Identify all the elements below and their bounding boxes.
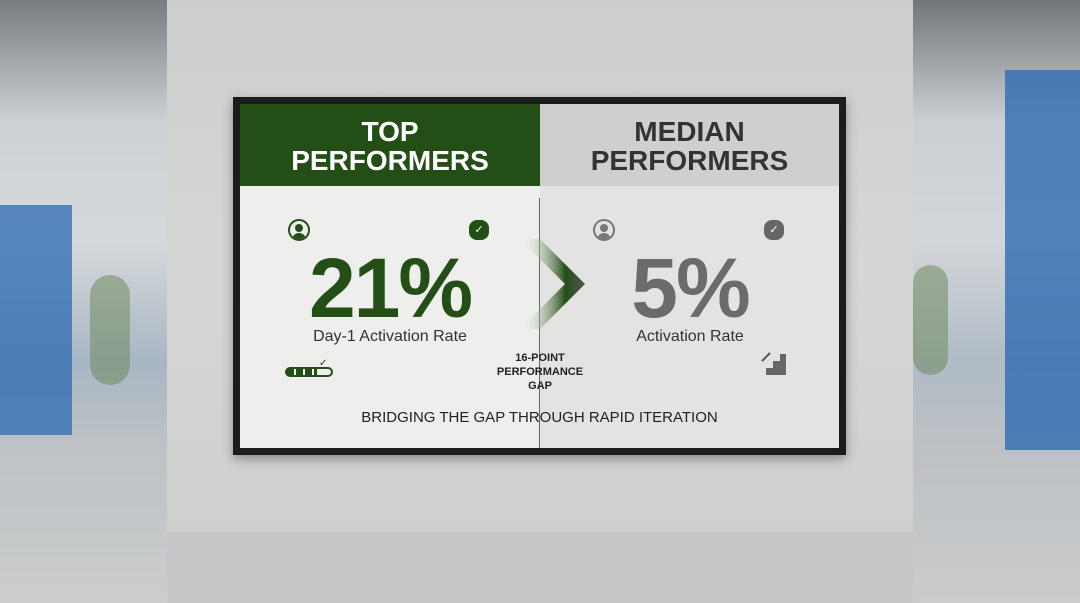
icon: badge left <box>469 220 489 240</box>
header: median performers: PERFORMERS <box>591 145 788 176</box>
icon: badge right <box>764 220 784 240</box>
text: gap: 16-POINT <box>515 352 565 364</box>
text: bottom tagline: BRIDGING THE GAP THROUGH RAPID ITERATION <box>361 409 718 426</box>
header: median performers <box>540 104 839 186</box>
text: gap: GAP <box>528 380 552 392</box>
header: top performers <box>240 104 540 186</box>
label: day-1: Day-1 Activation Rate <box>313 328 467 345</box>
divider <box>539 198 540 448</box>
icon: person right <box>593 219 615 241</box>
screen content <box>240 104 839 448</box>
text: gap: PERFORMANCE <box>497 366 583 378</box>
icon: person left <box>288 219 310 241</box>
header: top performers: TOP <box>361 116 419 147</box>
text: gap <box>497 352 583 392</box>
arrow: chevron <box>530 239 585 329</box>
header: top performers: PERFORMERS <box>291 145 489 176</box>
stat: 21%: 21% <box>309 241 471 335</box>
background: office corridor left <box>0 0 167 603</box>
screen frame <box>233 97 846 455</box>
background: concrete wall <box>167 0 913 532</box>
icon: progress bar: ✓ <box>319 358 327 369</box>
icon: badge right: ✓ <box>769 224 779 236</box>
icon: stairs <box>761 352 786 375</box>
background: floor <box>167 532 913 603</box>
stat: 5%: 5% <box>631 241 749 335</box>
right panel body tint <box>540 186 839 448</box>
icon: progress bar <box>285 358 333 377</box>
header: median performers: MEDIAN <box>634 116 745 147</box>
icon: badge left: ✓ <box>474 224 484 236</box>
background: office corridor right <box>913 0 1080 603</box>
label: activation rate: Activation Rate <box>636 328 744 345</box>
